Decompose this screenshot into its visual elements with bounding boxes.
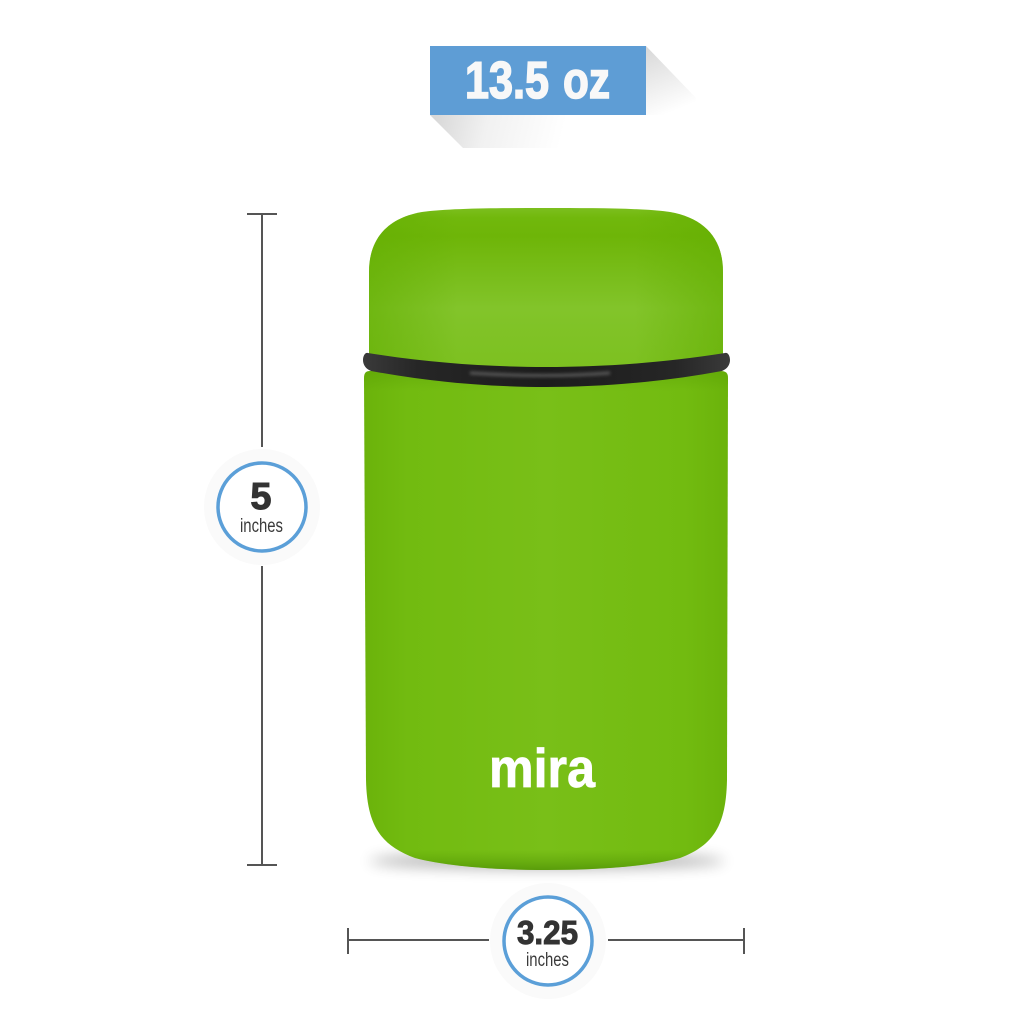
capacity badge <box>430 46 696 148</box>
width dimension line <box>348 928 744 954</box>
capacity badge: 13.5 <box>465 52 549 110</box>
black ring <box>363 353 730 387</box>
width badge: 3.25 inches <box>490 883 606 999</box>
height badge: 5 inches: inches <box>240 516 283 537</box>
brand logo: mira <box>489 737 595 799</box>
width badge: 3.25 inches: inches <box>526 950 569 971</box>
height badge: 5 inches <box>204 449 320 565</box>
width badge: 3.25 inches: 3.25 <box>517 914 578 951</box>
height dimension line <box>247 214 277 865</box>
jar lid <box>369 208 723 375</box>
jar ground shadow <box>369 853 725 869</box>
capacity badge: oz <box>563 52 610 110</box>
jar body <box>364 371 728 870</box>
jar product image <box>363 208 730 870</box>
height badge: 5 inches: 5 <box>250 476 272 518</box>
